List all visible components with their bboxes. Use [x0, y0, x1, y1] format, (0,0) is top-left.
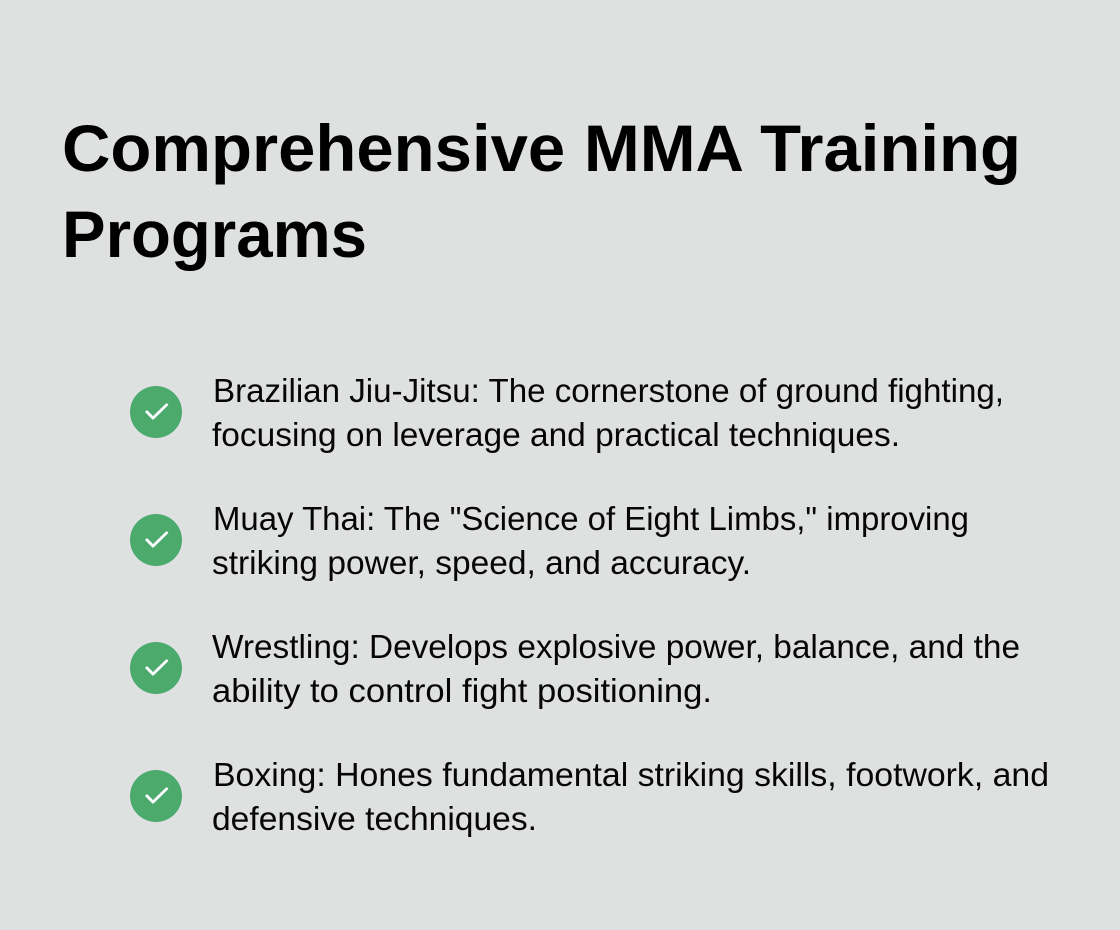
list item: Boxing: [130, 756, 1049, 837]
list item: Brazilian Jiu-Jitsu: [130, 372, 1004, 453]
text: Brazilian Jiu-Jitsu: [212, 372, 1004, 453]
icon: check circle: [130, 386, 182, 438]
text: Brazilian Jiu-Jitsu: focusing on leverage and practical techniques.: [212, 416, 900, 453]
list item: Muay Thai: [130, 500, 969, 581]
text: Boxing: [212, 756, 1049, 837]
list item: Wrestling: [130, 628, 1020, 709]
text: Muay Thai: [212, 500, 969, 581]
title: Comprehensive MMA Training: [62, 111, 1021, 185]
title: Programs: [62, 197, 367, 271]
text: Brazilian Jiu-Jitsu: Brazilian Jiu-Jitsu: The cornerstone of ground fighting,: [213, 372, 1004, 409]
text: Wrestling: ability to control fight positioning.: [212, 672, 712, 709]
text: Muay Thai: striking power, speed, and accuracy.: [212, 544, 751, 581]
icon: check circle: [130, 770, 182, 822]
title: [62, 111, 1021, 271]
text: Boxing: defensive techniques.: [212, 800, 537, 837]
text: Muay Thai: Muay Thai: The "Science of Eight Limbs," improving: [213, 500, 969, 537]
icon: check circle: [130, 514, 182, 566]
icon: check circle: [130, 642, 182, 694]
text: Wrestling: [212, 628, 1020, 709]
text: Wrestling: Wrestling: Develops explosive power, balance, and the: [212, 628, 1020, 665]
text: Boxing: Boxing: Hones fundamental striking skills, footwork, and: [213, 756, 1049, 793]
